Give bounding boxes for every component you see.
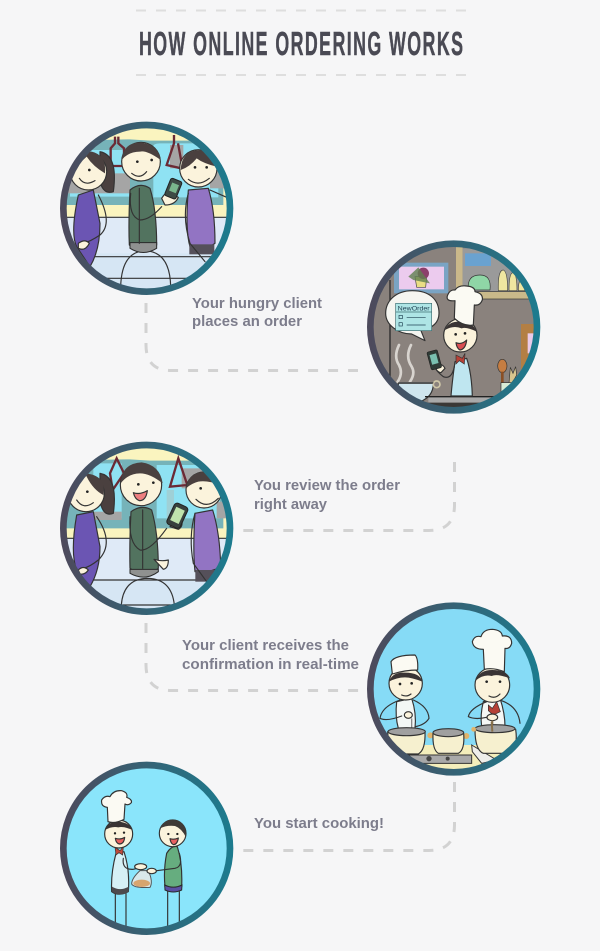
chef head (105, 820, 133, 848)
illustration: chef receives new order in kitchen (368, 242, 542, 412)
step 3 text (182, 637, 359, 673)
illustration: chef hands food to client (60, 763, 233, 933)
chef body (112, 852, 129, 894)
hands (135, 864, 147, 870)
right hat (472, 629, 512, 672)
hat (447, 286, 482, 325)
step 1 text: places an order (192, 313, 302, 330)
connector 3 (146, 623, 360, 690)
step 1 text: Your hungry client (192, 295, 322, 312)
right chef (481, 698, 505, 727)
food bag (132, 871, 151, 888)
step 4 text: You start cooking! (254, 815, 384, 832)
seat (121, 578, 174, 605)
title block: HOW ONLINE ORDERING WORKS (139, 25, 463, 62)
step 3 text: confirmation in real-time (182, 656, 359, 673)
ring (63, 125, 230, 292)
left hat (391, 655, 418, 674)
client legs (168, 892, 179, 926)
illustration: client on train ordering by phone (60, 123, 233, 293)
ring (370, 244, 537, 410)
illustration: chef receives new order in kitchen: NewOrder (398, 305, 430, 312)
boy right (187, 188, 215, 248)
step 1 text (192, 295, 322, 330)
chef hat (102, 791, 131, 822)
ring (63, 445, 230, 612)
connector 2 (243, 462, 454, 530)
ring (63, 765, 230, 932)
boy center (130, 507, 158, 574)
girl (74, 190, 100, 267)
chef legs (115, 893, 126, 927)
shelves (456, 247, 463, 293)
counter (428, 397, 492, 402)
ring (370, 606, 537, 772)
phone (170, 520, 182, 529)
connector 4 (243, 782, 454, 850)
step 3 text: Your client receives the (182, 637, 349, 654)
boy right (194, 510, 221, 572)
step 2 text (254, 477, 400, 513)
boy center (129, 185, 157, 251)
step 2 text: right away (254, 496, 328, 513)
pot (398, 383, 433, 402)
pots (388, 729, 425, 754)
left chef (396, 698, 415, 728)
client head (159, 820, 186, 847)
illustration: two chefs cooking (368, 603, 542, 775)
step 2 text: You review the order (254, 477, 400, 494)
chef body (451, 358, 472, 396)
bubble (386, 291, 439, 341)
picture (394, 263, 448, 293)
girl (73, 512, 100, 587)
phone (162, 192, 178, 205)
steam (396, 345, 413, 382)
head (444, 319, 477, 352)
counter (418, 745, 500, 769)
spoons (498, 359, 507, 373)
connector 1 (146, 303, 358, 370)
illustration: client on train reading confirmation (60, 443, 233, 613)
seat (121, 251, 171, 287)
client body (164, 846, 182, 889)
